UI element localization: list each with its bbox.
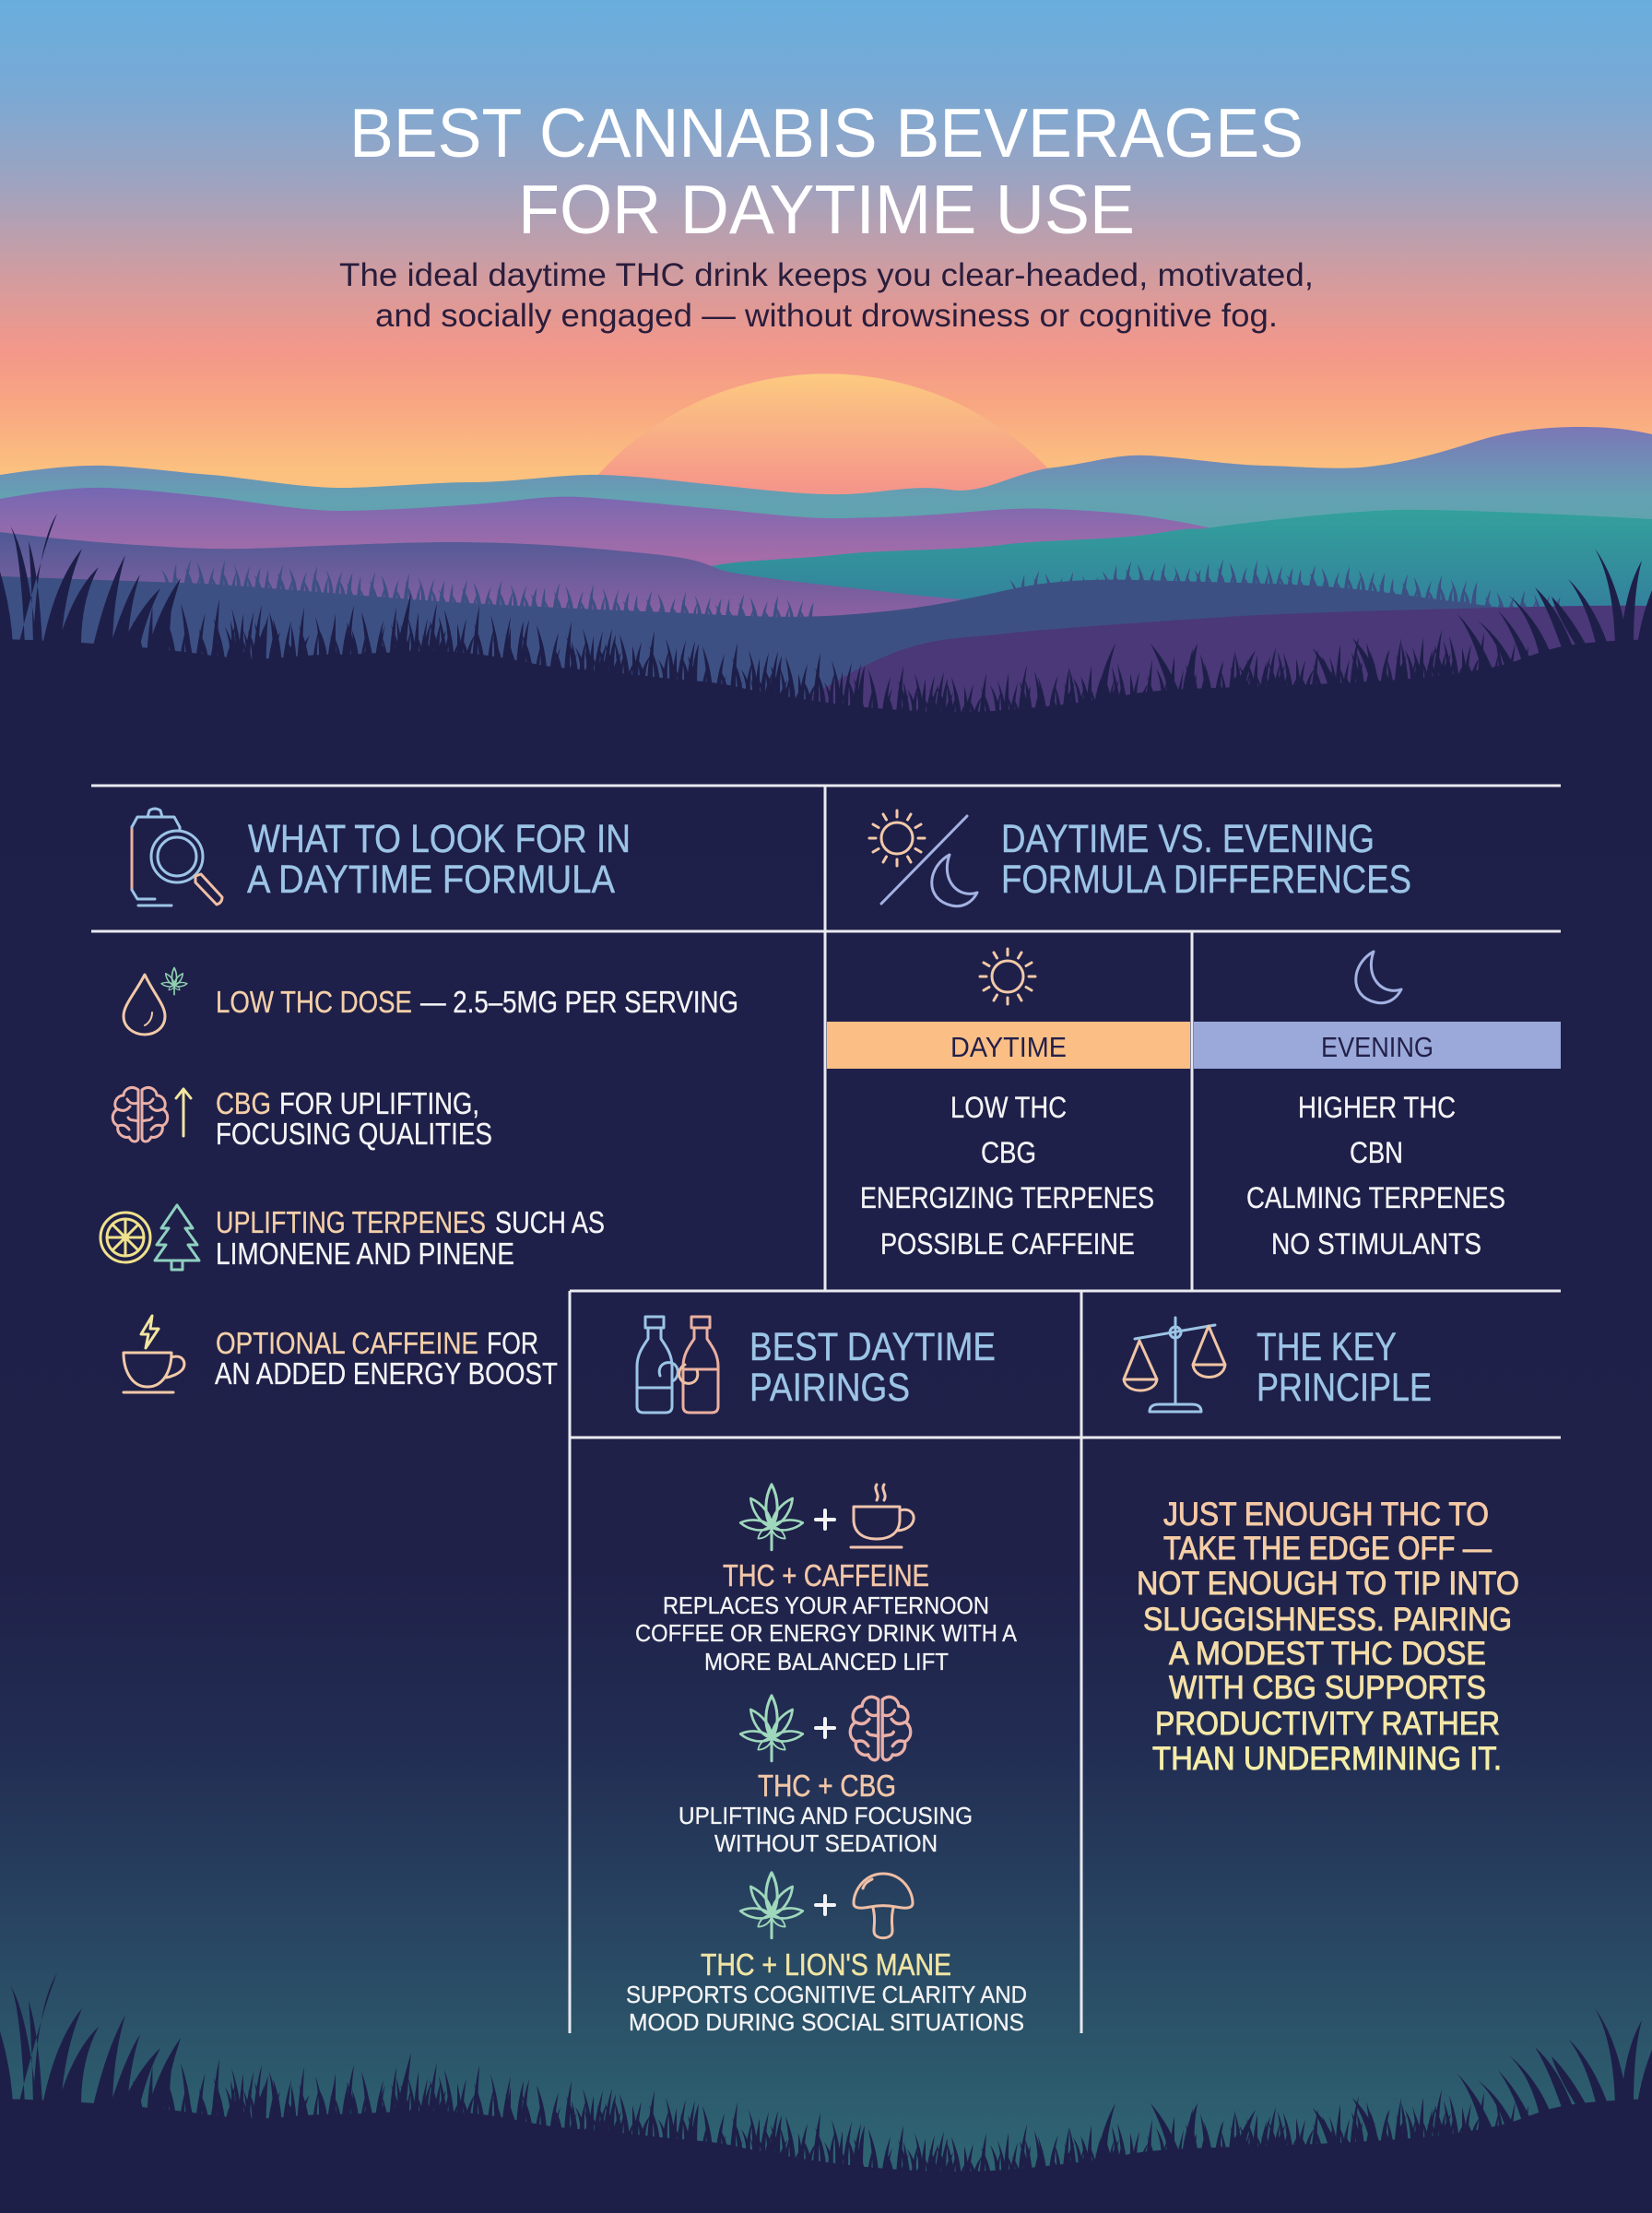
column: daytime: CBG xyxy=(981,1136,1036,1169)
item: low THC dose xyxy=(124,968,738,1035)
panel: the key principle xyxy=(1124,1318,1519,1777)
callout text: NOT ENOUGH TO TIP INTO xyxy=(1137,1566,1519,1602)
column: evening: EVENING xyxy=(1321,1031,1434,1063)
column: evening xyxy=(1194,952,1561,1260)
column: daytime xyxy=(827,949,1190,1260)
pairing: THC + CBG: WITHOUT SEDATION xyxy=(714,1829,938,1857)
callout text: A MODEST THC DOSE xyxy=(1169,1636,1486,1672)
sunset landscape xyxy=(0,373,1652,765)
pairing: THC + CBG: UPLIFTING AND FOCUSING xyxy=(678,1802,973,1829)
panel: daytime vs evening xyxy=(827,811,1561,1260)
title: BEST CANNABIS BEVERAGES xyxy=(349,94,1304,172)
pairing: THC + caffeine: THC + CAFFEINE xyxy=(723,1558,929,1592)
title xyxy=(349,94,1304,248)
heading: THE KEY xyxy=(1257,1325,1397,1369)
heading xyxy=(749,1325,996,1410)
item: caffeine xyxy=(124,1316,558,1392)
heading: A DAYTIME FORMULA xyxy=(247,858,615,902)
column: daytime: ENERGIZING TERPENES xyxy=(860,1181,1154,1214)
icon: brain and arrow xyxy=(112,1088,191,1142)
bottom grass silhouette xyxy=(0,1973,1652,2213)
pairing: THC + caffeine xyxy=(635,1485,1018,1675)
icon: can with magnifier xyxy=(132,809,222,905)
icon: lemon and pine xyxy=(100,1205,199,1270)
item: CBG: FOCUSING QUALITIES xyxy=(216,1117,492,1151)
pairing: THC + caffeine: REPLACES YOUR AFTERNOON xyxy=(663,1592,989,1619)
icon: sun xyxy=(980,949,1035,1004)
icon: leaf plus brain xyxy=(739,1696,911,1761)
item: CBG: FOR UPLIFTING, xyxy=(279,1086,479,1120)
subtitle: The ideal daytime THC drink keeps you clear-headed, motivated, xyxy=(339,257,1314,293)
rolling hills xyxy=(0,427,1652,738)
heading: DAYTIME VS. EVENING xyxy=(1001,817,1375,861)
icon: leaf plus cup xyxy=(739,1485,914,1550)
grid lines xyxy=(91,786,1561,2033)
icon: sun slash moon xyxy=(869,811,977,906)
panel: best daytime pairings xyxy=(626,1317,1027,2036)
sun xyxy=(579,373,1073,498)
item: caffeine: AN ADDED ENERGY BOOST xyxy=(215,1356,558,1391)
icon: leaf plus mushroom xyxy=(739,1873,913,1938)
item: low THC dose: — 2.5–5MG PER SERVING xyxy=(420,985,738,1019)
icon: moon xyxy=(1356,952,1401,1003)
daytime bar xyxy=(827,1022,1190,1069)
column: evening: CALMING TERPENES xyxy=(1246,1181,1505,1214)
subtitle: and socially engaged — without drowsiness or cognitive fog. xyxy=(375,298,1278,334)
title: FOR DAYTIME USE xyxy=(518,171,1135,248)
callout text: JUST ENOUGH THC TO xyxy=(1163,1497,1489,1533)
icon: cup and bolt xyxy=(124,1316,184,1392)
column: daytime: LOW THC xyxy=(950,1091,1067,1124)
pairing: THC + lion's mane: MOOD DURING SOCIAL SITUATIONS xyxy=(629,2008,1024,2036)
icon: drop and leaf xyxy=(124,968,187,1035)
item: CBG: CBG xyxy=(216,1086,271,1120)
heading: PRINCIPLE xyxy=(1257,1366,1432,1410)
pairing: THC + lion's mane: THC + LION'S MANE xyxy=(701,1947,951,1982)
item: terpenes xyxy=(100,1205,605,1271)
foreground grass silhouette xyxy=(0,514,1652,765)
callout text: PRODUCTIVITY RATHER xyxy=(1155,1706,1500,1742)
item: caffeine: OPTIONAL CAFFEINE xyxy=(216,1326,478,1360)
callout text: SLUGGISHNESS. PAIRING xyxy=(1143,1602,1512,1638)
column: daytime: POSSIBLE CAFFEINE xyxy=(880,1227,1135,1260)
pairing: THC + lion's mane: SUPPORTS COGNITIVE CLARITY AND xyxy=(626,1981,1027,2008)
heading xyxy=(1001,817,1411,902)
evening bar xyxy=(1194,1022,1561,1069)
heading xyxy=(1257,1325,1432,1410)
icon: two bottles xyxy=(637,1317,718,1413)
heading: BEST DAYTIME xyxy=(749,1325,996,1369)
callout text: THAN UNDERMINING IT. xyxy=(1152,1741,1502,1777)
callout text xyxy=(1137,1497,1519,1777)
column: evening: NO STIMULANTS xyxy=(1271,1227,1481,1260)
item: CBG xyxy=(112,1086,492,1151)
pairing: THC + CBG xyxy=(678,1696,973,1857)
column: evening: CBN xyxy=(1350,1136,1403,1169)
subtitle xyxy=(339,257,1314,334)
panel: what to look for xyxy=(100,809,738,1392)
callout text: TAKE THE EDGE OFF — xyxy=(1163,1531,1492,1567)
heading: PAIRINGS xyxy=(749,1366,910,1410)
pairing: THC + caffeine: COFFEE OR ENERGY DRINK WITH A xyxy=(635,1619,1018,1647)
column: evening: HIGHER THC xyxy=(1298,1091,1456,1124)
column: daytime: DAYTIME xyxy=(950,1031,1067,1063)
heading: FORMULA DIFFERENCES xyxy=(1001,858,1411,902)
item: caffeine: FOR xyxy=(487,1326,538,1360)
icon: balance scale xyxy=(1124,1318,1225,1412)
callout text: WITH CBG SUPPORTS xyxy=(1169,1670,1486,1706)
pairing: THC + caffeine: MORE BALANCED LIFT xyxy=(704,1648,949,1675)
heading: WHAT TO LOOK FOR IN xyxy=(248,817,631,861)
pairing: THC + CBG: THC + CBG xyxy=(758,1769,896,1803)
pairing: THC + lion's mane xyxy=(626,1873,1027,2036)
heading xyxy=(247,817,631,902)
item: terpenes: UPLIFTING TERPENES xyxy=(216,1205,486,1239)
item: low THC dose: LOW THC DOSE xyxy=(216,985,412,1019)
item: terpenes: LIMONENE AND PINENE xyxy=(216,1237,514,1271)
item: terpenes: SUCH AS xyxy=(495,1205,605,1239)
